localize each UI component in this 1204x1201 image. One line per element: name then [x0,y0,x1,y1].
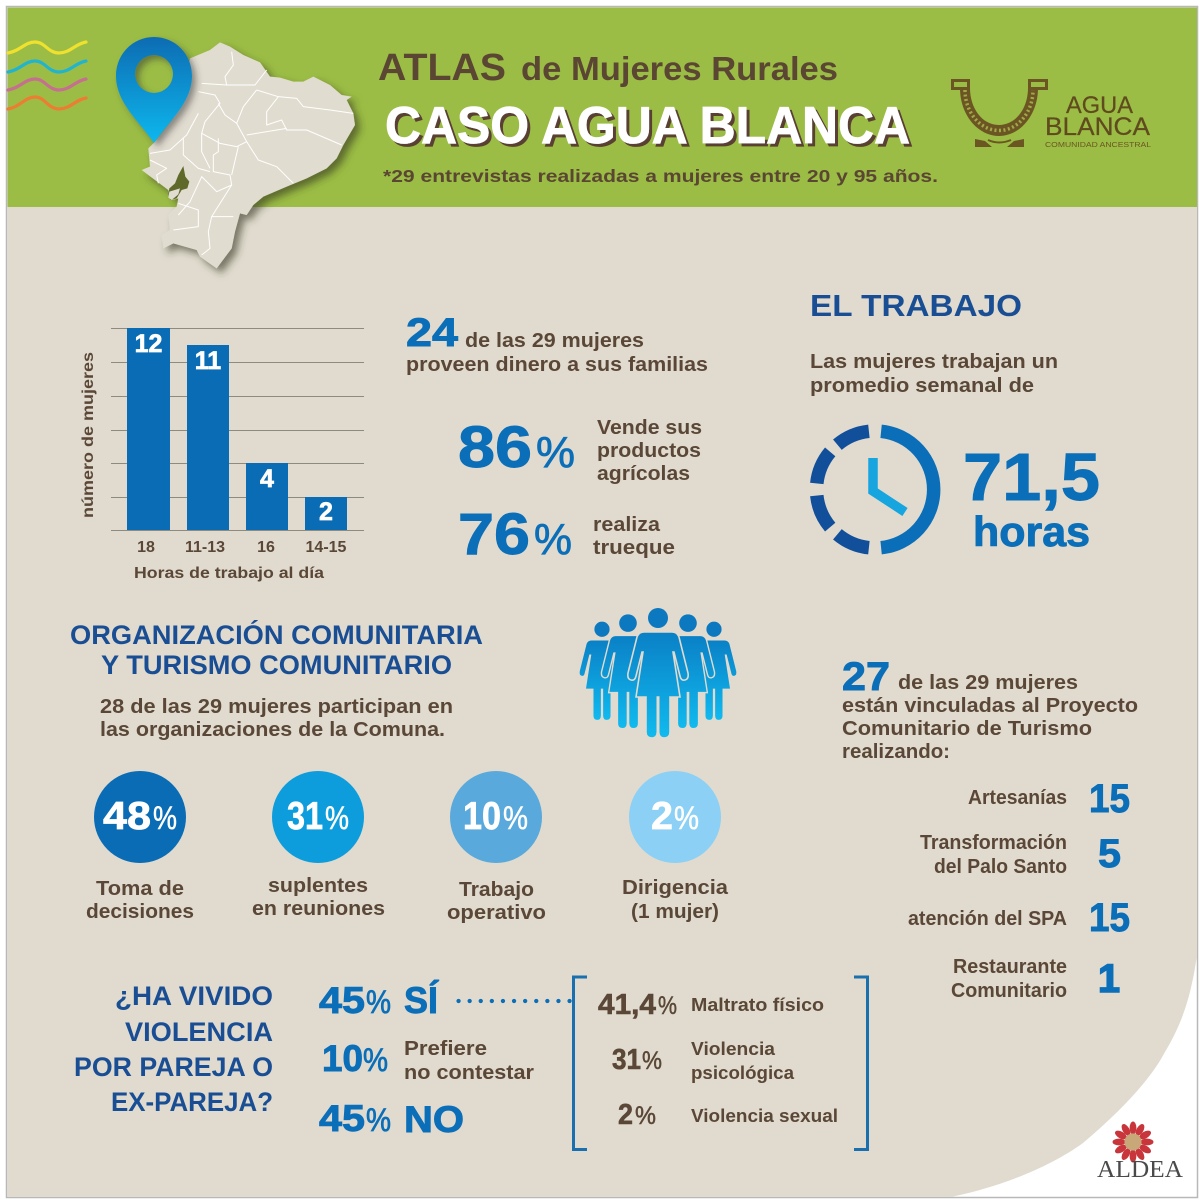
circle stat: 48% decisions: 48 [103,795,151,838]
heading: violence question: EX-PAREJA? [111,1087,273,1117]
stat: 24 of 29 provide money: 24 [406,311,459,355]
violence type: psychological: 31 [612,1044,641,1076]
stat: 76% barter: 76 [458,502,530,567]
x axis labels [137,539,347,556]
stat: 27 of 29 linked to tourism: están vinculadas al Proyecto [842,695,1138,717]
x axis labels: 16 [257,539,275,556]
bar chart: hours of work per day [80,328,364,582]
x axis labels: 18 [137,539,155,556]
list: tourism activities: 15 [1089,777,1130,821]
answer: 45% yes: 45 [319,980,365,1021]
y axis title: número de mujeres [80,352,97,518]
text: participation [100,696,453,741]
bar 18 hours [127,328,170,530]
violence type: sexual: 2 [618,1099,633,1131]
circle stat: 31% meetings [252,771,385,920]
logo emblem [951,79,1048,147]
stat: 76% barter: realiza [593,514,661,536]
stat: 76% barter: trueque [593,537,675,559]
x axis labels: 11-13 [185,539,225,556]
list: tourism activities: 15 [1089,896,1130,940]
header band [8,8,1197,207]
list: tourism activities: Comunitario [951,980,1067,1002]
x axis title: Horas de trabajo al día [134,565,324,582]
stat: 71,5 horas: 71,5 [963,440,1100,515]
answer: 10% prefer not to answer: 10 [322,1038,363,1079]
stat: 27 of 29 linked to tourism: 27 [842,655,890,699]
stat: 27 of 29 linked to tourism [842,655,1138,763]
circle stat: 2% leadership: (1 mujer) [631,901,719,923]
stat: 76% barter [458,502,675,567]
heading: community organization: ORGANIZACIÓN COMUNITARIA [70,619,483,650]
stat: 86% sell products: agrícolas [597,463,690,485]
violence type: physical: % [658,992,677,1020]
circle stat: 10% operative [447,771,546,924]
violence type: psychological: % [642,1047,662,1075]
violence type: physical: Maltrato físico [691,995,824,1015]
circle stat: 48% decisions: Toma de [96,878,184,900]
text: participation: las organizaciones de la Comuna. [100,719,445,741]
dotted connector [458,999,571,1003]
stat: 86% sell products [458,415,702,485]
stat: 76% barter: % [534,515,572,564]
brackets [574,977,868,1150]
violence type: physical [598,989,824,1021]
icon: colored waves [8,42,86,109]
violence type: sexual: Violencia sexual [691,1106,838,1126]
heading: violence question: VIOLENCIA [125,1017,273,1047]
circle stat: 31% meetings: en reuniones [252,898,385,920]
logo flower [1112,1122,1154,1162]
circle stat: 10% operative: % [503,800,528,836]
heading: El trabajo: EL TRABAJO [810,288,1022,323]
bar 14-15 hours [305,497,347,530]
province lines [150,52,353,255]
stat: 86% sell products: % [536,428,575,477]
bar 14-15 hours: 2 [319,498,333,526]
text: weekly average [810,351,1058,397]
text: weekly average: promedio semanal de [810,375,1034,397]
stat: 24 of 29 provide money: de las 29 mujeres [465,330,644,352]
circle stat: 48% decisions [86,771,194,923]
subtitle: *29 entrevistas realizadas a mujeres entre 20 y 95 años. [383,166,938,186]
list: tourism activities: atención del SPA [908,908,1067,930]
circle stat: 48% decisions: % [153,800,177,836]
answer: 10% prefer not to answer: % [363,1042,388,1078]
answer: 45% no [319,1098,464,1140]
logo: Agua Blanca: BLANCA [1045,113,1150,141]
logo: Agua Blanca [951,79,1151,149]
stat: 24 of 29 provide money: proveen dinero a sus familias [406,354,708,376]
list: tourism activities: Artesanías [968,787,1067,809]
answer: 45% no: NO [404,1099,464,1140]
answer: 45% yes: % [366,984,391,1020]
bar 11-13 hours: 11 [195,347,221,375]
bar 16 hours [246,463,288,530]
circle stat: 2% leadership [622,771,729,923]
circle stat: 10% operative: Trabajo [459,879,534,901]
heading: community organization [70,619,483,680]
circle stat: 48% decisions: decisiones [86,901,194,923]
logo: Aldea [1097,1122,1184,1183]
stat: 86% sell products: productos [597,440,701,462]
circle stat: 10% operative: 10 [463,795,501,838]
circle stat: 10% operative: operativo [447,902,546,924]
bar 11-13 hours [187,345,229,530]
circle stat: 31% meetings: % [325,800,349,836]
logo text: ALDEA [1097,1157,1184,1183]
stat: 71,5 horas: horas [973,508,1090,555]
list: tourism activities: Restaurante [953,956,1067,978]
answer: 45% no: % [366,1102,391,1138]
stat: 86% sell products: 86 [458,415,532,480]
violence type: psychological: psicológica [691,1063,795,1083]
answer: 10% prefer not to answer [322,1038,534,1084]
heading: violence question [74,981,273,1117]
bar 18 hours: 12 [135,330,162,358]
gulf of Guayaquil [168,166,189,200]
list: tourism activities: 5 [1098,832,1121,876]
answer: 45% yes: SÍ [404,980,440,1021]
logo: Agua Blanca: COMUNIDAD ANCESTRAL [1045,142,1151,149]
heading: violence question: ¿HA VIVIDO [115,981,273,1011]
violence type: physical: 41,4 [598,989,656,1021]
title: Caso Agua Blanca: CASO AGUA BLANCA [385,97,910,155]
stat: 27 of 29 linked to tourism: realizando: [842,741,950,763]
icon: clock [817,431,934,548]
circle stat: 31% meetings: suplentes [268,875,368,897]
list: tourism activities [908,777,1130,1002]
violence type: psychological: Violencia [691,1039,776,1059]
title: Atlas: de Mujeres Rurales [521,50,838,87]
circle stat: 31% meetings: 31 [287,795,323,838]
text: participation: 28 de las 29 mujeres participan en [100,696,453,718]
violence type: sexual [618,1099,838,1131]
icon: group of women [579,608,737,738]
list: tourism activities: del Palo Santo [934,856,1067,878]
map of Ecuador [142,42,355,268]
title: Atlas [378,47,838,89]
violence type: sexual: % [635,1102,656,1130]
x axis labels: 14-15 [306,539,347,556]
stat: 71,5 horas [963,440,1100,555]
answer: 45% no: 45 [319,1098,365,1139]
heading: violence question: POR PAREJA O [74,1052,273,1082]
stat: 24 of 29 provide money [406,311,708,376]
text: weekly average: Las mujeres trabajan un [810,351,1058,373]
list: tourism activities: 1 [1098,957,1120,1001]
circle stat: 2% leadership: % [674,800,699,836]
violence type: psychological [612,1039,795,1083]
circle stat: 2% leadership: Dirigencia [622,877,729,899]
stat: 27 of 29 linked to tourism: Comunitario de Turismo [842,718,1092,740]
stat: 86% sell products: Vende sus [597,417,702,439]
heading: community organization: Y TURISMO COMUNITARIO [101,650,452,680]
logo text: AGUA [1066,92,1133,119]
bar 16 hours: 4 [260,465,274,493]
title: Atlas: ATLAS [378,47,506,89]
answer: 45% yes [319,980,440,1021]
answer: 10% prefer not to answer: no contestar [404,1062,534,1084]
stat: 27 of 29 linked to tourism: de las 29 mujeres [898,672,1078,694]
icon: location pin [116,37,192,143]
list: tourism activities: Transformación [920,832,1067,854]
circle stat: 2% leadership: 2 [651,795,673,838]
answer: 10% prefer not to answer: Prefiere [404,1038,487,1060]
